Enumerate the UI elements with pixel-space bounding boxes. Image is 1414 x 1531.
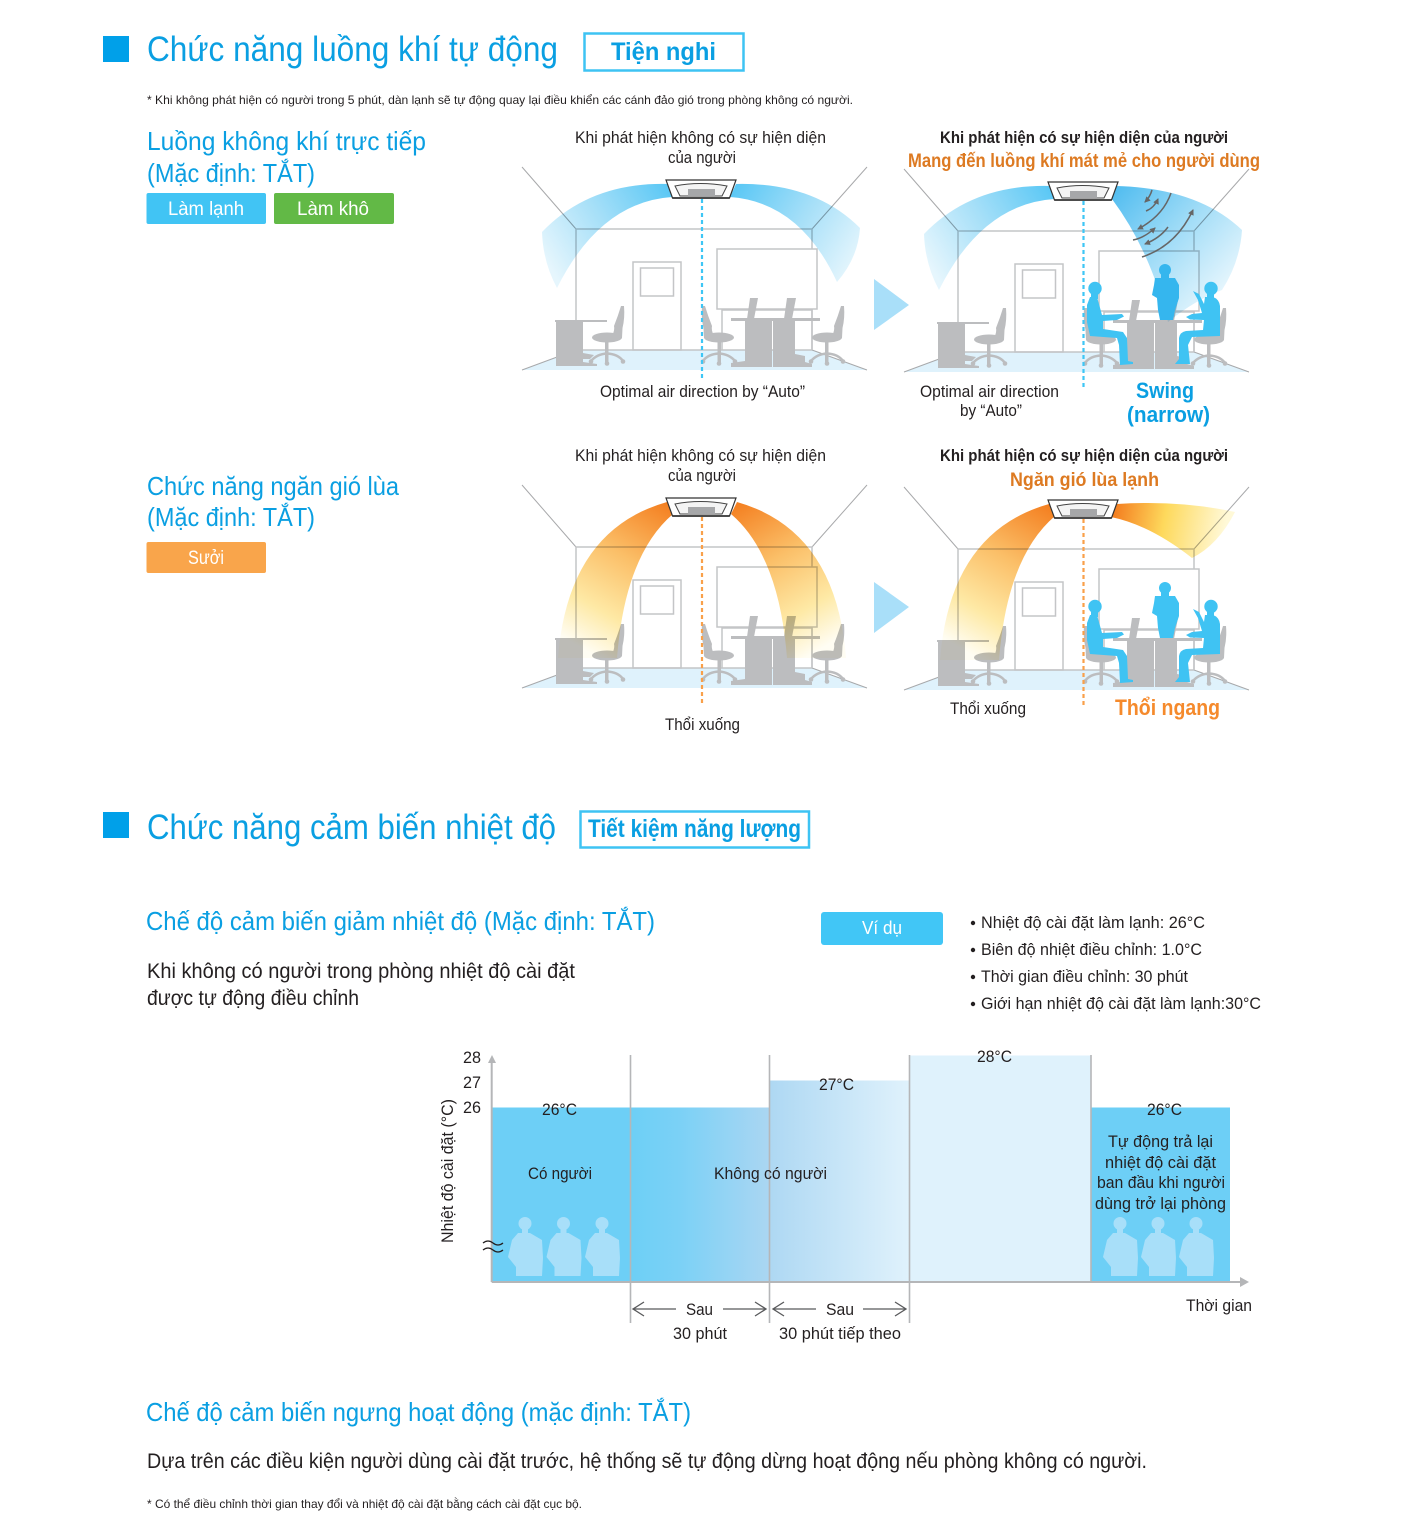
caption: Khi phát hiện không có sự hiện diện: [575, 446, 826, 465]
airflow left: [940, 504, 1055, 660]
button: heating: Sưởi: [188, 548, 224, 569]
ceiling cassette unit: [1048, 182, 1118, 200]
section heading: air flow: [103, 30, 744, 70]
button: example: Ví dụ: [862, 918, 902, 938]
label: occupied: Có người: [528, 1164, 592, 1183]
label: auto return: dùng trở lại phòng: [1095, 1194, 1226, 1213]
arrows: time spans: [633, 1302, 906, 1316]
text block: stop mode description: Dựa trên các điều kiện người dùng cài đặt trước, hệ thống sẽ tự động dừng hoạt động nếu phòng không có người.: [147, 1450, 1147, 1473]
y axis ticks: [463, 1048, 481, 1117]
section heading: temperature sensor: [103, 808, 809, 848]
text block: setback description: Khi không có người trong phòng nhiệt độ cài đặt: [147, 960, 575, 983]
y axis ticks: 26: [463, 1098, 481, 1117]
temperature labels: 27°C: [819, 1075, 854, 1094]
label: auto return: Tự động trả lại: [1108, 1132, 1213, 1151]
caption orange: Ngăn gió lùa lạnh: [1010, 469, 1159, 491]
airflow right: [731, 502, 846, 658]
bar: vacant transition: [631, 1108, 770, 1282]
heading: direct airflow: Luồng không khí trực tiếp: [147, 126, 426, 156]
y axis ticks: 28: [463, 1048, 481, 1067]
label: auto return: [1095, 1132, 1226, 1213]
list: example settings: [971, 913, 1261, 1013]
label: after 30 minutes: [673, 1300, 727, 1343]
room illustration: [904, 487, 1249, 690]
text block: setback description: được tự động điều chỉnh: [147, 987, 359, 1010]
badge: comfort: Tiện nghi: [611, 38, 716, 66]
button: dry: Làm khô: [297, 199, 369, 220]
caption by auto: by “Auto”: [960, 402, 1022, 420]
label: after 30 minutes: 30 phút: [673, 1324, 727, 1343]
label: auto return: ban đầu khi người: [1097, 1173, 1225, 1192]
button: example: [821, 912, 943, 945]
footnote: no person note: * Khi không phát hiện có người trong 5 phút, dàn lạnh sẽ tự động quay lại điều khiển các cánh đảo gió trong phòng không có người.: [147, 93, 853, 107]
label: vacant: Không có người: [714, 1164, 827, 1183]
label: next 30 minutes: [779, 1300, 901, 1343]
axes: [488, 1055, 1249, 1323]
label: after 30 minutes: Sau: [686, 1300, 713, 1319]
y axis title: Nhiệt độ cài đặt (°C): [438, 1099, 457, 1243]
caption bold: Khi phát hiện có sự hiện diện của người: [940, 447, 1228, 465]
label swing: Swing: [1136, 378, 1194, 403]
label horizontal: Thổi ngang: [1115, 695, 1220, 720]
badge: comfort: [584, 34, 744, 70]
ceiling cassette unit: [666, 180, 736, 198]
panel: draft prevention label: [146, 471, 399, 573]
x axis title: Thời gian: [1186, 1296, 1252, 1315]
button: heating: [146, 542, 266, 573]
label narrow: (narrow): [1127, 402, 1210, 427]
standing person: [1152, 264, 1179, 320]
heading: default off: (Mặc định: TẮT): [147, 502, 315, 532]
y axis ticks: 27: [463, 1073, 481, 1092]
button: cooling: Làm lạnh: [168, 199, 244, 220]
heading: stop mode: Chế độ cảm biến ngưng hoạt động (mặc định: TẮT): [146, 1397, 691, 1427]
people: [1087, 582, 1220, 683]
caption blow down: Thổi xuống: [950, 699, 1026, 718]
panel: direct airflow label: [146, 126, 426, 224]
temperature labels: 28°C: [977, 1047, 1012, 1066]
room illustration: [522, 485, 867, 688]
label: next 30 minutes: Sau: [826, 1300, 854, 1319]
axis break mark: [483, 1241, 503, 1252]
panel: room 4, person present, horizontal: [904, 447, 1249, 720]
label: auto return: nhiệt độ cài đặt: [1105, 1153, 1216, 1172]
caption optimal: Optimal air direction: [920, 383, 1059, 401]
swing arrows: [1133, 190, 1193, 257]
button: cooling: [146, 193, 266, 224]
bar: back to 26: [1091, 1108, 1230, 1282]
dashed centre line: [1082, 519, 1085, 708]
airflow left: [558, 502, 673, 658]
panel: room 1, no person, blue airflow: [522, 128, 867, 401]
title: air flow function: Chức năng luồng khí tự động: [147, 30, 558, 69]
title: temperature sensor function: Chức năng cảm biến nhiệt độ: [147, 808, 556, 847]
airflow left: [924, 186, 1054, 290]
list: example settings: Biên độ nhiệt điều chỉnh: 1.0°C: [981, 940, 1202, 959]
chart: set temperature over time: [438, 1047, 1252, 1343]
airflow right: [730, 184, 860, 282]
arrow: room 3 to room 4: [874, 582, 909, 633]
button: dry: [274, 193, 394, 224]
caption blow down: Thổi xuống: [665, 715, 740, 734]
airflow left: [542, 184, 672, 288]
airflow swing: [1112, 186, 1242, 322]
icon: blue square: [103, 812, 129, 838]
heading: setback mode: Chế độ cảm biến giảm nhiệt độ (Mặc định: TẮT): [146, 906, 655, 936]
caption second line: của người: [668, 466, 736, 485]
badge: energy saving: [580, 812, 809, 848]
footnote: local setting: * Có thể điều chỉnh thời gian thay đổi và nhiệt độ cài đặt bằng cách cài đặt cục bộ.: [147, 1496, 582, 1511]
caption optimal: Optimal air direction by “Auto”: [600, 383, 805, 401]
heading: draft prevention: Chức năng ngăn gió lùa: [147, 471, 399, 501]
list: example settings: Giới hạn nhiệt độ cài đặt làm lạnh:30°C: [981, 994, 1261, 1013]
seated people: [1087, 282, 1220, 365]
panel: room 2, person present, swing: [904, 129, 1260, 427]
icon: blue square: [103, 36, 129, 62]
label: next 30 minutes: 30 phút tiếp theo: [779, 1324, 901, 1343]
room illustration: [904, 169, 1249, 372]
list: example settings: Thời gian điều chỉnh: 30 phút: [981, 967, 1188, 986]
airflow horizontal: [1111, 503, 1235, 558]
dashed centre line: [701, 517, 703, 706]
caption: Khi phát hiện không có sự hiện diện: [575, 128, 826, 147]
ceiling cassette unit: [666, 498, 736, 516]
arrow: room 1 to room 2: [874, 279, 909, 330]
bar: occupied 26: [492, 1108, 631, 1282]
caption bold: Khi phát hiện có sự hiện diện của người: [940, 129, 1228, 147]
bar: 28: [910, 1056, 1091, 1282]
silhouettes: people right: [1103, 1217, 1214, 1276]
panel: room 3, no person, orange airflow: [522, 446, 867, 734]
dashed centre line: [1082, 201, 1085, 390]
ceiling cassette unit: [1048, 500, 1118, 518]
room illustration: [522, 167, 867, 370]
temperature labels: 26°C: [542, 1100, 577, 1119]
caption second line: của người: [668, 148, 736, 167]
badge: energy saving: Tiết kiệm năng lượng: [588, 815, 801, 843]
list: example settings: Nhiệt độ cài đặt làm lạnh: 26°C: [981, 913, 1205, 932]
silhouettes: people left: [508, 1217, 620, 1276]
bar: 27: [770, 1080, 910, 1282]
temperature labels: [542, 1047, 1182, 1119]
heading: default off: (Mặc định: TẮT): [147, 158, 315, 188]
caption orange: Mang đến luồng khí mát mẻ cho người dùng: [908, 150, 1260, 172]
temperature labels: 26°C: [1147, 1100, 1182, 1119]
text block: setback description: [147, 960, 575, 1010]
dashed centre line: [701, 199, 703, 378]
